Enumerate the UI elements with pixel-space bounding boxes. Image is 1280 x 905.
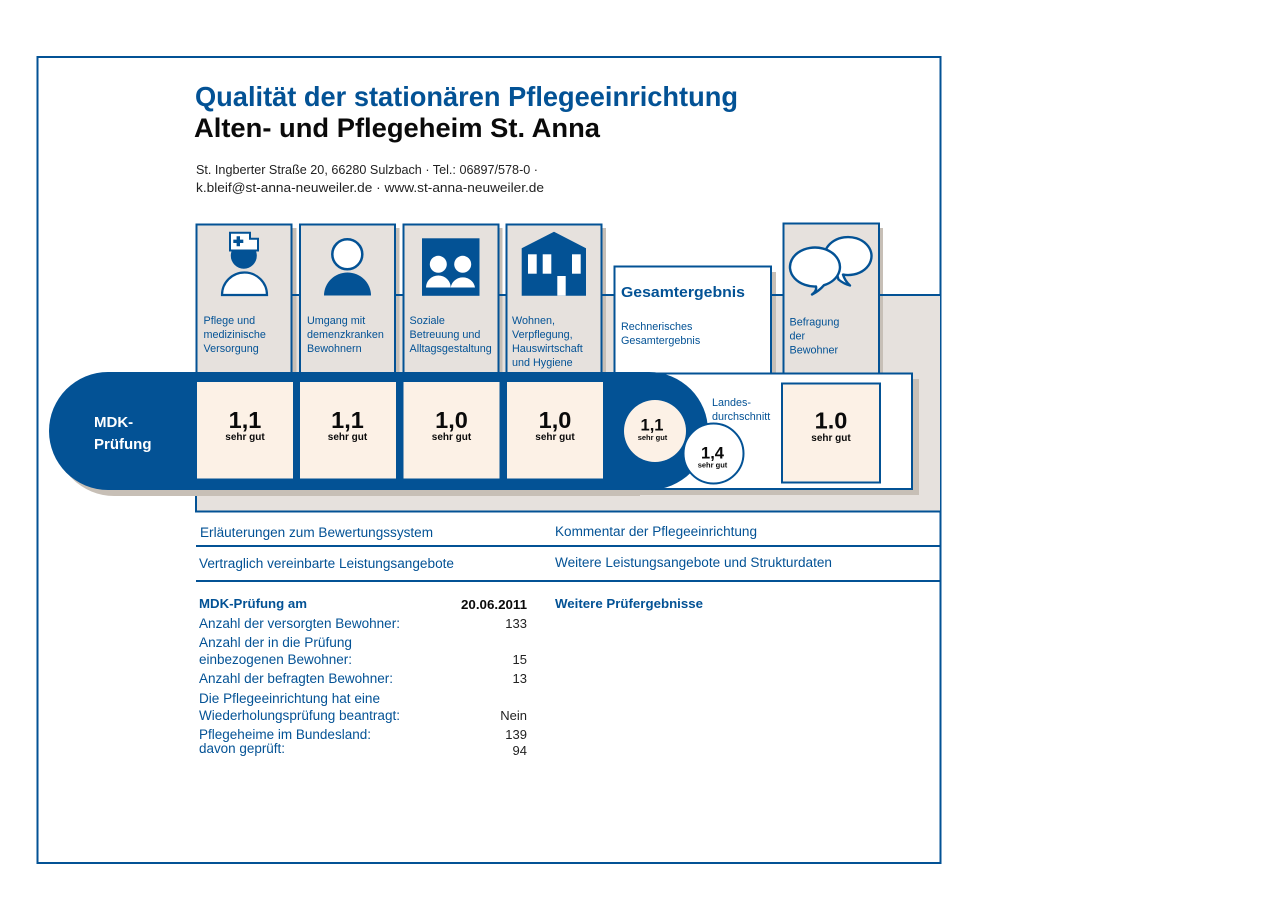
score: Umgang mit demenzkranken Bewohnern: sehr gut [328, 432, 368, 443]
label: demenzkranken [307, 329, 384, 341]
label: Alltagsgestaltung [410, 343, 492, 355]
pill label [94, 414, 152, 453]
row labels: Die Pflegeeinrichtung hat eine [199, 691, 380, 706]
label [307, 315, 384, 355]
score: Pflege und medizinische Versorgung [197, 382, 293, 478]
row heading: MDK-Prüfung am [199, 597, 307, 611]
row labels [199, 616, 400, 756]
label [204, 315, 266, 355]
score: Befragung der Bewohner: sehr gut [811, 433, 851, 444]
row values: 133 [505, 616, 527, 631]
score: Befragung der Bewohner: 1.0 [815, 408, 847, 434]
icon: house [522, 232, 586, 296]
panel: Wohnen, Verpflegung, Hauswirtschaft und Hygiene [506, 224, 606, 374]
row labels: Anzahl der in die Prüfung [199, 635, 352, 650]
label: Befragung [790, 316, 839, 328]
score: Befragung der Bewohner [782, 384, 880, 482]
label [410, 315, 492, 355]
score: Umgang mit demenzkranken Bewohnern [300, 382, 396, 478]
score circle: Landesdurchschnitt: sehr gut [698, 460, 728, 470]
pill label: MDK- [94, 414, 133, 431]
row labels: davon geprüft: [199, 741, 285, 756]
row values [500, 616, 527, 758]
link: Leistungsangebote: Vertraglich vereinbarte Leistungsangebote [199, 556, 454, 571]
icon: speech bubbles [790, 237, 872, 294]
label: Umgang mit [307, 315, 365, 327]
panel: Umgang mit demenzkranken Bewohnern [300, 224, 400, 374]
label: Landesdurchschnitt [712, 397, 770, 423]
icon: nurse [222, 233, 267, 295]
row values: 139 [505, 727, 527, 742]
row values: Nein [500, 708, 527, 723]
label: Soziale [410, 315, 445, 327]
row labels: einbezogenen Bewohner: [199, 652, 352, 667]
address and contact: St. Ingberter Straße 20, 66280 Sulzbach · Tel.: 06897/578-0 · [196, 162, 538, 177]
score: Soziale Betreuung und Alltagsgestaltung: 1,0 [435, 407, 468, 433]
score: Soziale Betreuung und Alltagsgestaltung [404, 382, 500, 478]
score: Pflege und medizinische Versorgung: sehr gut [225, 432, 265, 443]
panel: Befragung der Bewohner [784, 224, 883, 374]
link: Bewertungssystem: Erläuterungen zum Bewertungssystem [200, 525, 433, 540]
row labels: Anzahl der befragten Bewohner: [199, 671, 393, 686]
title block [194, 81, 738, 195]
score: Wohnen, Verpflegung, Hauswirtschaft und Hygiene [507, 382, 603, 478]
label: Bewohner [790, 344, 839, 356]
row labels: Anzahl der versorgten Bewohner: [199, 616, 400, 631]
label: Landesdurchschnitt: durchschnitt [712, 411, 770, 423]
label: Versorgung [204, 343, 259, 355]
address and contact [196, 162, 544, 195]
row values: 94 [513, 743, 527, 758]
label: Betreuung und [410, 329, 480, 341]
label [512, 315, 583, 369]
heading: Gesamtergebnis [621, 285, 745, 301]
score: Wohnen, Verpflegung, Hauswirtschaft und Hygiene: 1,0 [539, 407, 571, 433]
link: Strukturdaten: Weitere Leistungsangebote und Strukturdaten [555, 555, 832, 570]
heading: quality title: Qualität der stationären Pflegeeinrichtung [195, 81, 738, 112]
row labels: Wiederholungsprüfung beantragt: [199, 708, 400, 723]
icon: person [324, 239, 371, 296]
panel: Soziale Betreuung und Alltagsgestaltung [404, 224, 502, 374]
label [621, 321, 701, 347]
heading: further results: Weitere Prüfergebnisse [555, 597, 703, 611]
navigation links [196, 524, 940, 581]
label: Verpflegung, [512, 329, 573, 341]
MDK-Prüfung pill [49, 372, 708, 496]
outer frame [38, 57, 940, 863]
score: Pflege und medizinische Versorgung: 1,1 [229, 407, 261, 433]
score circle: Landesdurchschnitt: 1,4 [701, 444, 725, 462]
score circle: Gesamtergebnis: sehr gut [638, 433, 668, 442]
pill label: Prüfung [94, 436, 152, 453]
score circle: Landesdurchschnitt [684, 424, 744, 484]
icon: group of residents [422, 238, 480, 296]
label: Hauswirtschaft [512, 343, 583, 355]
label: und Hygiene [512, 357, 573, 369]
link: Kommentar: Kommentar der Pflegeeinrichtung [555, 524, 757, 539]
heading: facility name: Alten- und Pflegeheim St. Anna [194, 113, 601, 143]
label: Gesamtergebnis [621, 335, 701, 347]
label: Bewohnern [307, 343, 362, 355]
text block: MDK-Prüfung details [199, 597, 527, 758]
inspection date: 20.06.2011 [461, 598, 527, 612]
score circle: Gesamtergebnis [624, 400, 686, 462]
panel: Gesamtergebnis [614, 266, 776, 374]
grey results background panel [196, 295, 941, 512]
label: Landesdurchschnitt: Landes- [712, 397, 751, 409]
row values: 13 [513, 671, 527, 686]
row labels: Pflegeheime im Bundesland: [199, 727, 371, 742]
row values: 15 [513, 652, 527, 667]
score: Soziale Betreuung und Alltagsgestaltung: sehr gut [432, 432, 472, 443]
label: Wohnen, [512, 315, 555, 327]
results box [640, 374, 919, 495]
panel: Pflege und medizinische Versorgung [196, 224, 296, 374]
label: der [790, 330, 806, 342]
label: Rechnerisches [621, 321, 693, 333]
address and contact: k.bleif@st-anna-neuweiler.de · www.st-anna-neuweiler.de [196, 180, 544, 195]
score: Umgang mit demenzkranken Bewohnern: 1,1 [331, 407, 364, 433]
score circle: Gesamtergebnis: 1,1 [641, 416, 663, 434]
label: Pflege und [204, 315, 255, 327]
label [790, 316, 839, 356]
label: medizinische [204, 329, 266, 341]
score: Wohnen, Verpflegung, Hauswirtschaft und Hygiene: sehr gut [535, 432, 575, 443]
